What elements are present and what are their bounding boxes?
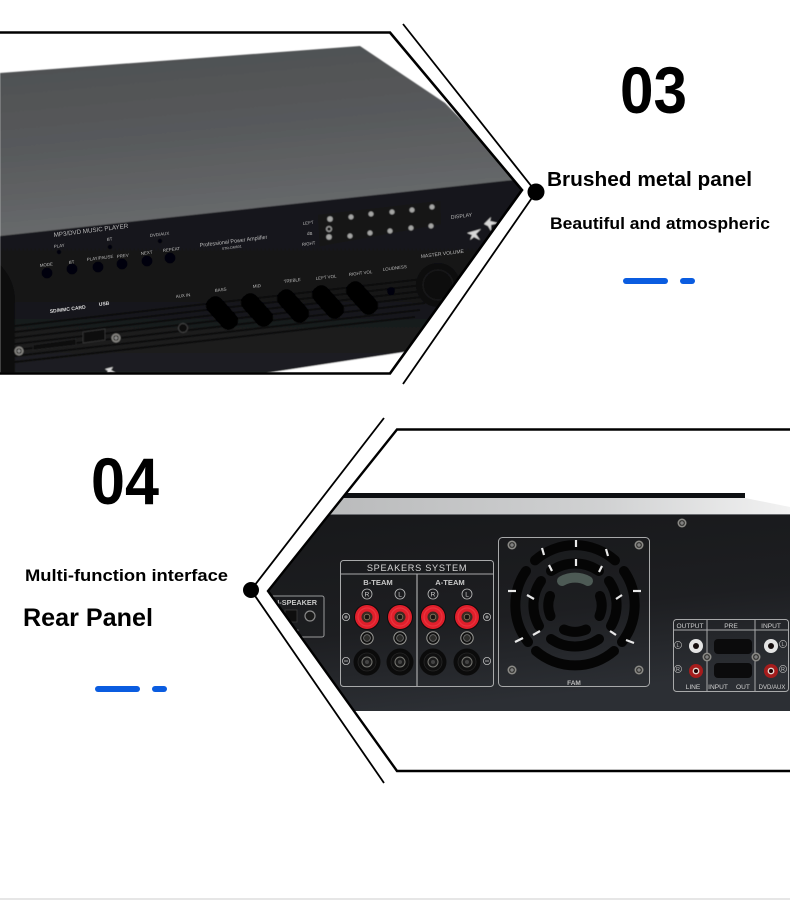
accent: blue dashes bottom [95,686,167,692]
front panel labels: SD/MMC CARD [50,305,86,315]
front panel labels: Professional Power Amplifier [200,235,268,249]
front panel labels: BT [107,236,113,242]
panel: rear panel photo [250,430,790,771]
speakers system block: SPEAKERS SYSTEM [367,563,467,573]
front panel labels: DVD/AUX [150,231,170,238]
terminal nuts [361,632,473,644]
R and L channel marks [342,589,491,665]
accent: blue dashes top [623,278,695,284]
audio input output block: OUT [736,684,750,691]
text: Beautiful and atmospheric: Beautiful and atmospheric [550,214,770,233]
heading: Rear Panel: Rear Panel [23,604,153,632]
front panel labels: dB [307,231,312,236]
in-speaker block [272,596,324,638]
channel marks: L [782,642,784,648]
front panel labels: RIGHT [302,240,316,247]
R and L channel marks: L [465,592,469,598]
front panel labels: PLAY/PAUSE [87,254,114,262]
bottom white wedge [266,351,404,372]
channel marks: R [781,667,785,673]
front panel labels: PREV [117,253,129,259]
black speaker terminals [354,648,480,676]
audio input output block [673,619,789,692]
R and L channel marks: L [398,592,402,598]
speakers system block: B-TEAM [363,578,393,587]
logo birds [105,217,498,375]
fan screws [508,540,644,674]
front panel labels: AUX IN [176,292,191,299]
audio input output block: LINE [686,684,701,691]
top frame line [0,32,522,374]
rear face [260,514,790,711]
in-speaker block: IN-SPEAKER [272,600,317,607]
card slot, USB port and jack [33,324,188,350]
fan white spokes [508,540,641,643]
speakers system block [340,560,494,687]
amplifier front face [0,180,530,373]
fan grille block [498,538,650,687]
channel marks: R [676,667,680,673]
front panel labels: REPEAT [163,246,181,253]
in-speaker block: N [294,629,299,636]
channel marks [674,640,787,673]
RCA jacks [689,639,778,678]
amplifier top surface [0,46,530,240]
audio input output block: PRE [724,623,738,630]
vent stripes [15,277,440,362]
front panel labels: LEFT VOL [316,273,337,281]
top screw [678,518,686,528]
light top strip [320,498,790,515]
R and L channel marks: R [365,592,370,598]
panel: brushed metal front photo [0,32,530,376]
front panel labels: MODE [40,261,53,268]
front panel labels [40,212,473,315]
top outer chevron with dot [403,24,544,384]
front panel labels: PLAY [54,243,65,249]
audio input output block: INPUT [708,684,728,691]
heading: 04: 04 [91,444,159,518]
display indicator dots [326,204,434,240]
front panel labels: LEFT [303,220,314,226]
fan slots [515,545,635,665]
audio input output block: INPUT [761,623,781,630]
heading: Brushed metal panel: Brushed metal panel [547,168,752,191]
front panel labels: TREBLE [284,277,301,284]
transport buttons [42,239,395,295]
rotary knobs [206,281,378,331]
display window [318,201,441,246]
front panel labels: NEXT [141,250,153,256]
front panel labels: LOUDNESS [383,264,407,272]
channel marks: L [676,643,680,649]
audio input output block: DVD/AUX [759,685,785,691]
front panel screws [14,334,120,356]
front panel labels: BASS [215,287,227,293]
front panel labels: MID [253,283,261,289]
front panel labels: DISPLAY [451,212,473,221]
heading: 03: 03 [620,53,687,127]
fan grille block: FAM [567,680,581,687]
front panel labels: MASTER VOLUME [421,249,465,260]
speakers system block: A-TEAM [435,578,465,587]
audio input output block: OUTPUT [676,623,704,630]
block screws [702,652,760,662]
front panel labels: STR-DM601 [222,245,242,251]
front panel labels: BT [69,259,75,265]
R and L channel marks: R [431,592,436,598]
left rack handle [0,265,15,373]
bottom outer chevron with dot [243,418,384,783]
bottom frame line [268,430,790,771]
front panel labels: MP3/DVD MUSIC PLAYER [53,223,129,239]
master volume knob [416,263,460,307]
red speaker terminals [354,604,480,630]
text: Multi-function interface: Multi-function interface [25,567,228,585]
top black lip [330,493,745,498]
front panel labels: USB [99,301,110,308]
front panel labels: RIGHT VOL [349,269,373,277]
pre link plugs [714,639,752,678]
